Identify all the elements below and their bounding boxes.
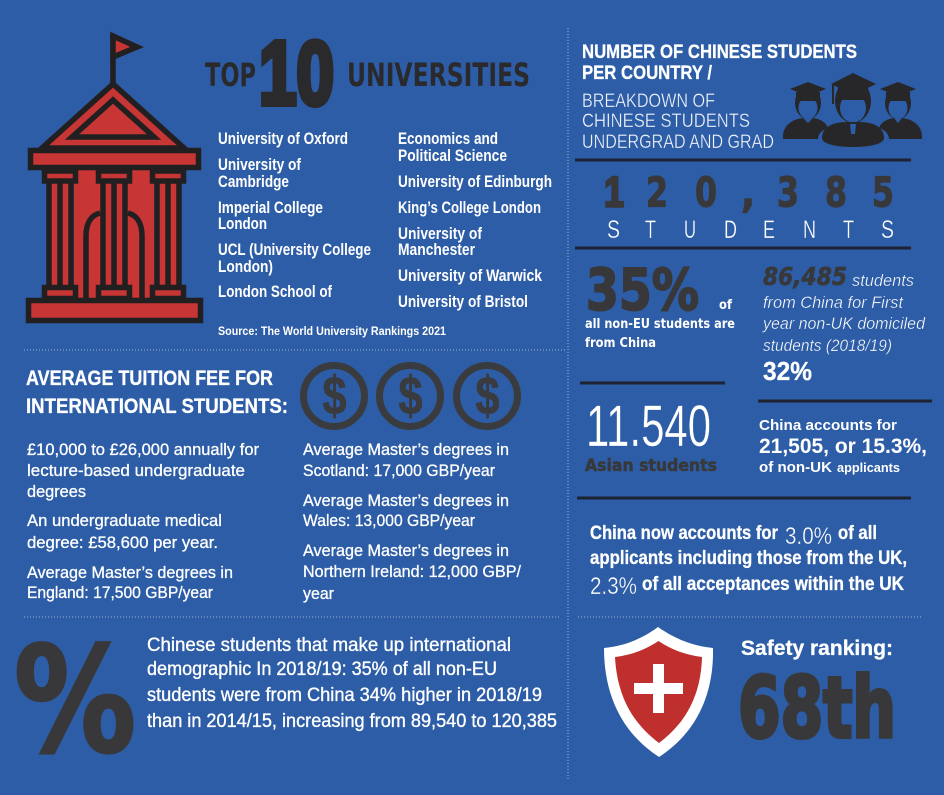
stat: 120,385 students: 2 — [646, 168, 668, 216]
stat: 120,385 students: T — [843, 216, 854, 244]
text block: tuition fees, right column: Northern Ireland: 12,000 GBP/ — [303, 562, 521, 581]
stat: 120,385 students: T — [645, 216, 656, 244]
text block: university list, right column: University of Warwick — [398, 267, 543, 285]
stat: 120,385 students: N — [803, 216, 816, 244]
safety ranking: Safety ranking: — [741, 637, 893, 660]
text block: university list, right column: University of — [398, 225, 482, 243]
text block: demographic summary: than in 2014/15, increasing from 89,540 to 120,385 — [147, 711, 557, 732]
text block: university list, right column: King’s College London — [398, 199, 541, 217]
text block: tuition fees, left column: degrees — [27, 482, 86, 501]
icons: three dollar coins: $ — [476, 366, 500, 426]
icon: university building — [28, 34, 200, 320]
heading: average tuition fee: INTERNATIONAL STUDENTS: — [26, 395, 288, 418]
heading: number of Chinese students: NUMBER OF CHINESE STUDENTS — [582, 42, 857, 63]
stat: 86,485 first-year students: 32% — [763, 356, 812, 386]
text block: university list, right column: Political Science — [398, 147, 507, 165]
stat: 120,385 students: S — [881, 216, 894, 244]
heading: number of Chinese students: PER COUNTRY / — [582, 63, 713, 84]
title: UNIVERSITIES — [347, 56, 530, 94]
heading: average tuition fee — [26, 367, 288, 418]
stat: 86,485 first-year students: year non-UK domiciled — [762, 314, 926, 333]
text block: university list, right column: University of Bristol — [398, 293, 528, 311]
icons: three dollar coins — [304, 366, 518, 426]
stat: 86,485 first-year students: students — [852, 271, 914, 290]
text block: tuition fees, right column: Average Master’s degrees in — [303, 491, 509, 510]
stat: 120,385 students: E — [763, 216, 775, 244]
stat: 120,385 students: 5 — [872, 168, 894, 216]
text block: university list, left column: London) — [218, 258, 273, 276]
stat: non-UK applicants: applicants — [837, 460, 900, 475]
stat: 86,485 first-year students: 86,485 — [763, 262, 847, 291]
text block: share of applicants and acceptances: applicants including those from the UK, — [590, 548, 907, 569]
stat: 120,385 students — [604, 168, 894, 244]
stat: non-UK applicants: of non-UK — [759, 459, 832, 476]
text block: university list, right column: University of Edinburgh — [398, 173, 552, 191]
title: 10 — [259, 24, 334, 124]
text block: university list, left column: University of — [218, 156, 301, 174]
text block: university list, left column: Imperial College — [218, 199, 323, 217]
text block: demographic summary — [147, 635, 557, 732]
stat: 11.540 Asian students: Asian students — [585, 456, 717, 476]
stat: 86,485 first-year students: students (2018/19) — [763, 336, 892, 355]
stat: 35% non-EU: from China — [585, 336, 656, 351]
text block: university list, left column — [218, 130, 371, 301]
stat: 86,485 first-year students: from China for First — [763, 293, 904, 312]
text block: tuition fees, right column: year — [303, 584, 334, 603]
text block: tuition fees, left column: Average Master’s degrees in — [27, 563, 233, 582]
heading: number of Chinese students: CHINESE STUDENTS — [582, 111, 750, 132]
stat: non-UK applicants: China accounts for — [759, 417, 897, 434]
text block: share of applicants and acceptances: of all acceptances within the UK — [642, 574, 904, 595]
source note: Source: The World University Rankings 2021 — [218, 326, 447, 338]
text block: university list, left column: UCL (University College — [218, 241, 371, 259]
text block: university list, left column: London — [218, 215, 267, 233]
stat: 35% non-EU: all non-EU students are — [585, 317, 735, 332]
text block: tuition fees, left column — [27, 440, 259, 602]
stat: 35% non-EU — [585, 258, 735, 351]
text block: tuition fees, right column: Average Master’s degrees in — [303, 440, 509, 459]
heading: number of Chinese students: BREAKDOWN OF — [582, 91, 715, 112]
stat: non-UK applicants — [759, 417, 927, 476]
text block: tuition fees, left column: degree: £58,600 per year. — [27, 533, 218, 552]
title — [205, 24, 530, 124]
stat: 120,385 students: 3 — [777, 168, 799, 216]
text block: university list, left column: Cambridge — [218, 173, 289, 191]
stat: 120,385 students: , — [741, 168, 755, 216]
heading: average tuition fee: AVERAGE TUITION FEE FOR — [26, 367, 273, 390]
stat: 86,485 first-year students — [762, 262, 926, 386]
text block: demographic summary: demographic In 2018/19: 35% of all non-EU — [147, 659, 497, 680]
text block: tuition fees, right column — [303, 440, 521, 603]
text block: demographic summary: Chinese students that make up international — [147, 635, 511, 656]
stat: 120,385 students: 1 — [604, 168, 624, 216]
icon: percent sign: % — [14, 616, 136, 786]
stat: 120,385 students: S — [607, 216, 620, 244]
text block: tuition fees, left column: lecture-based undergraduate — [27, 461, 245, 480]
text block: tuition fees, left column: An undergraduate medical — [27, 511, 222, 530]
text block: university list, left column: London School of — [218, 283, 332, 301]
icons: three dollar coins: $ — [322, 366, 346, 426]
text block: share of applicants and acceptances: of all — [838, 523, 877, 544]
stat: 120,385 students: 0 — [695, 168, 717, 216]
text block: tuition fees, left column: England: 17,500 GBP/year — [27, 583, 213, 602]
text block: share of applicants and acceptances: China now accounts for — [590, 523, 779, 544]
icon: three graduates — [783, 73, 922, 147]
stat: 35% non-EU: 35% — [586, 258, 699, 324]
stat: 120,385 students: U — [684, 216, 696, 244]
heading: number of Chinese students: UNDERGRAD AND GRAD — [582, 132, 774, 153]
stat: 35% non-EU: of — [719, 298, 732, 313]
safety ranking — [738, 637, 896, 757]
text block: share of applicants and acceptances: 2.3% — [590, 573, 637, 600]
text block: share of applicants and acceptances: 3.0% — [785, 523, 832, 550]
text block: university list, left column: University of Oxford — [218, 130, 348, 148]
heading: number of Chinese students — [582, 42, 857, 153]
text block: tuition fees, right column: Wales: 13,000 GBP/year — [303, 511, 475, 530]
text block: tuition fees, right column: Scotland: 17,000 GBP/year — [303, 461, 495, 480]
text block: university list, right column — [398, 130, 552, 311]
stat: 120,385 students: 8 — [825, 168, 847, 216]
text block: university list, right column: Manchester — [398, 241, 475, 259]
stat: non-UK applicants: 21,505, or 15.3%, — [759, 435, 927, 458]
text block: share of applicants and acceptances — [590, 523, 907, 600]
stat: 120,385 students: D — [724, 216, 737, 244]
text block: demographic summary: students were from China 34% higher in 2018/19 — [147, 685, 542, 706]
stat: 11.540 Asian students — [585, 394, 717, 476]
icons: three dollar coins: $ — [398, 366, 422, 426]
text block: tuition fees, left column: £10,000 to £26,000 annually for — [27, 440, 259, 459]
stat: 11.540 Asian students: 11.540 — [586, 394, 711, 459]
icon: safety shield — [604, 627, 713, 757]
title: TOP — [205, 56, 256, 94]
text block: university list, right column: Economics and — [398, 130, 498, 148]
text block: tuition fees, right column: Average Master’s degrees in — [303, 541, 509, 560]
